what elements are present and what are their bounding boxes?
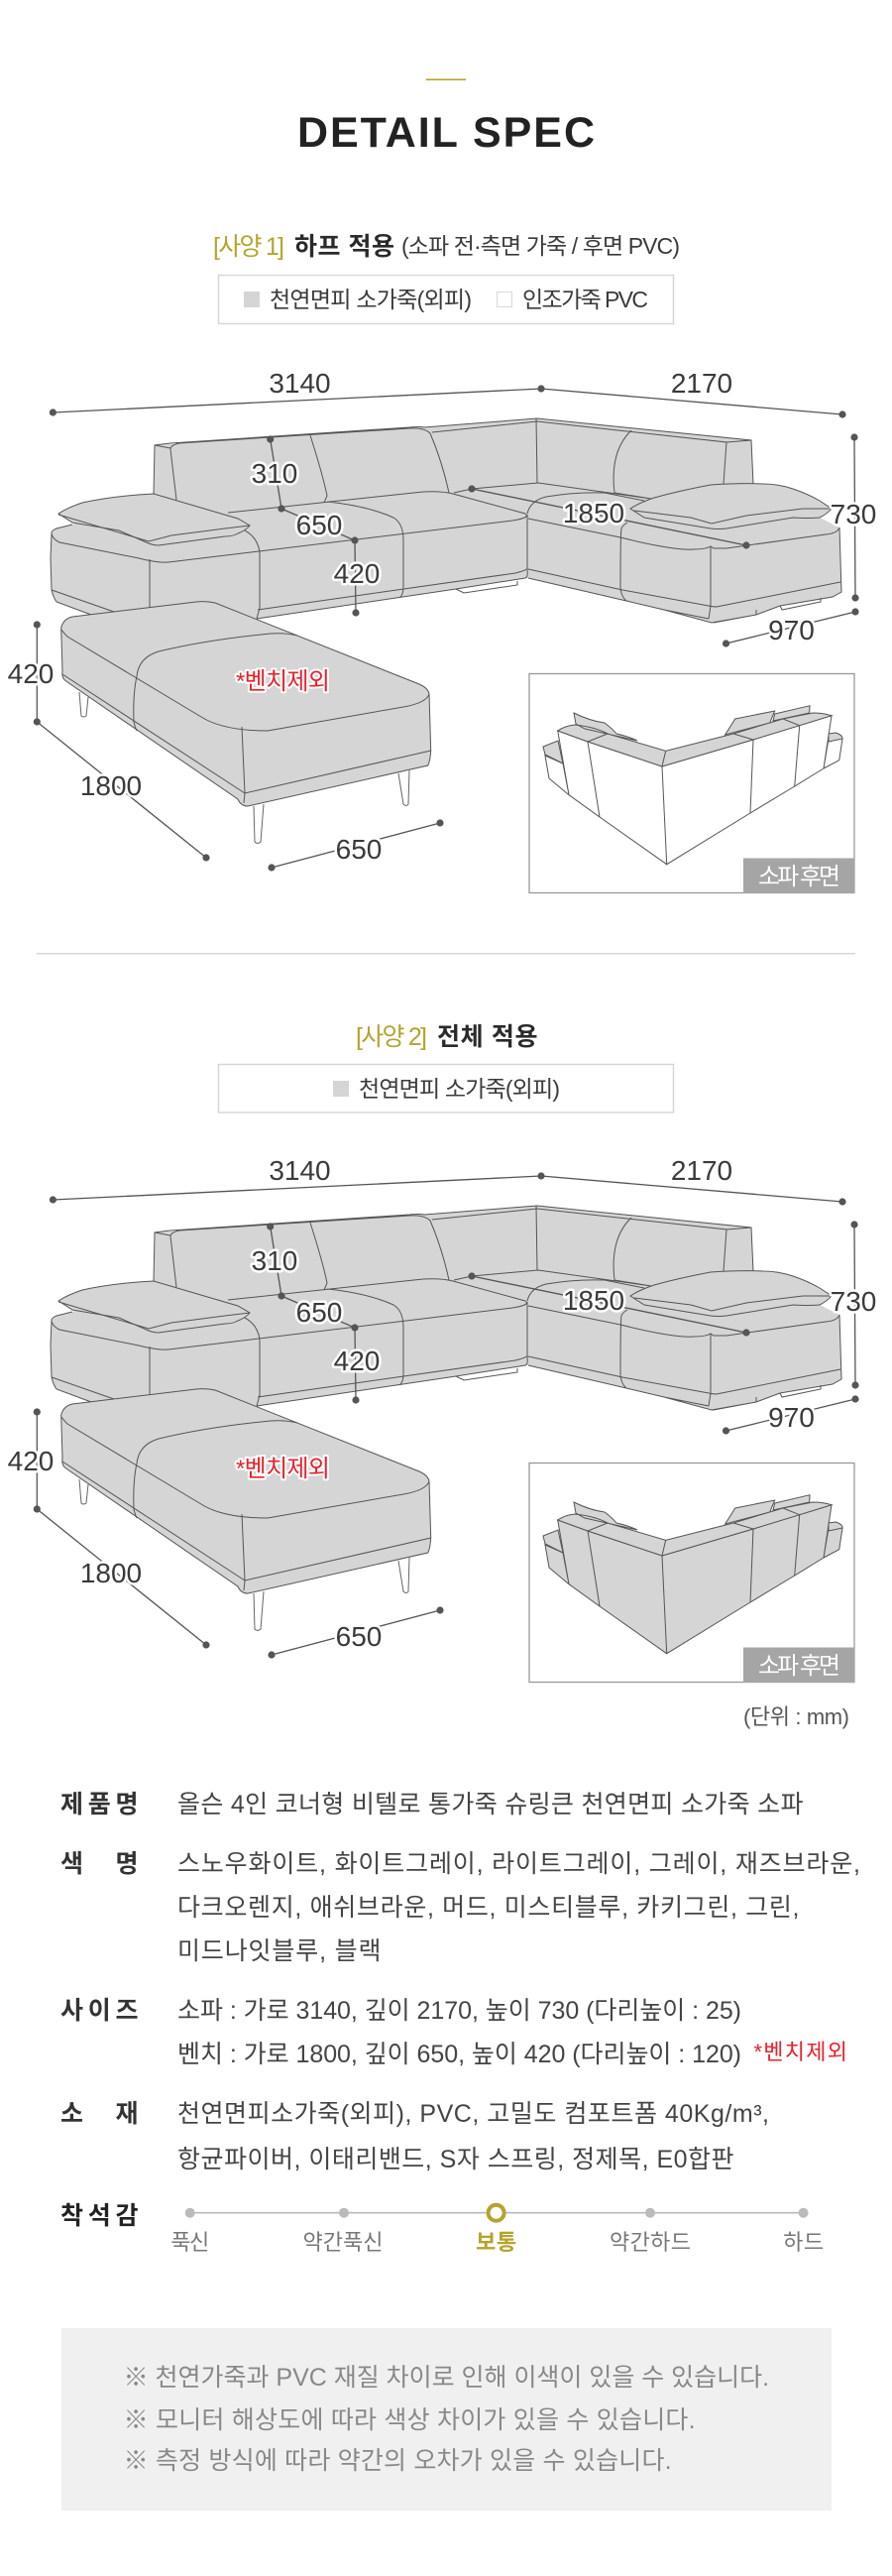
sofa diagram: spec 2 xyxy=(8,1155,876,1659)
rear view panel: spec 2 xyxy=(529,1464,854,1683)
dimension lines xyxy=(37,1176,855,1655)
sofa diagram: spec 1 xyxy=(8,368,876,872)
dimension labels: 650 xyxy=(336,834,382,865)
spec: material: 천연면피소가죽(외피), PVC, 고밀도 컴포트폼 40Kg/m³, xyxy=(177,2100,769,2128)
title accent line xyxy=(426,79,466,80)
legend box: spec 2 xyxy=(218,1065,674,1112)
spec: seating feel scale: 푹신 xyxy=(170,2230,209,2255)
dimension labels: 1800 xyxy=(80,1558,142,1588)
spec: material xyxy=(60,2100,769,2173)
legend box: spec 2: 천연면피 소가죽(외피) xyxy=(359,1076,560,1102)
legend box: spec 1: 천연면피 소가죽(외피) xyxy=(270,287,472,312)
spec: size: *벤치제외 xyxy=(753,2040,847,2064)
title: DETAIL SPEC xyxy=(297,109,595,157)
dimension labels: 2170 xyxy=(671,368,732,399)
dimension labels: 650 xyxy=(296,1297,342,1328)
notice box xyxy=(61,2328,832,2511)
spec: colors: 다크오렌지, 애쉬브라운, 머드, 미스티블루, 카키그린, 그린, xyxy=(177,1894,799,1922)
dimension labels: 650 xyxy=(336,1621,382,1652)
spec: colors: 스노우화이트, 화이트그레이, 라이트그레이, 그레이, 재즈브라운, xyxy=(177,1850,860,1878)
spec: seating feel scale: 보통 xyxy=(476,2230,516,2255)
bench excluded note: *벤치제외 xyxy=(236,668,330,695)
heading: spec 1: (소파 전·측면 가죽 / 후면 PVC) xyxy=(401,233,680,259)
spec: size: 벤치 : 가로 1800, 깊이 650, 높이 420 (다리높이 : 120) xyxy=(177,2041,741,2068)
spec: product name: 제품명 xyxy=(60,1791,139,1818)
dimension labels: 420 xyxy=(8,1446,54,1476)
dimension labels: 2170 xyxy=(671,1155,732,1186)
dimension labels: 420 xyxy=(334,558,380,589)
notice box: ※ 측정 방식에 따라 약간의 오차가 있을 수 있습니다. xyxy=(124,2447,672,2475)
unit note: (단위 : mm) xyxy=(743,1704,849,1729)
rear view panel: spec 2: 소파 후면 xyxy=(758,1653,840,1680)
dimension labels: 3140 xyxy=(269,1155,331,1186)
dimension labels: 730 xyxy=(831,1286,876,1317)
dimension labels: 650 xyxy=(296,510,342,540)
dimension labels: 1850 xyxy=(563,498,624,528)
dimension labels: 970 xyxy=(768,1402,815,1433)
spec: product name: 올슨 4인 코너형 비텔로 통가죽 슈링큰 천연면피 소가죽 소파 xyxy=(177,1791,803,1818)
rear view panel: spec 1 xyxy=(529,674,854,893)
dimension lines xyxy=(37,389,855,868)
spec: seating feel scale xyxy=(60,2202,824,2255)
heading: spec 2: 전체 적용 xyxy=(437,1023,537,1051)
spec: seating feel scale: 약간푹신 xyxy=(303,2230,383,2255)
spec: size: 소파 : 가로 3140, 깊이 2170, 높이 730 (다리높이 : 25) xyxy=(177,1997,741,2025)
notice box: ※ 모니터 해상도에 따라 색상 차이가 있을 수 있습니다. xyxy=(124,2406,696,2434)
notice box: ※ 천연가죽과 PVC 재질 차이로 인해 이색이 있을 수 있습니다. xyxy=(124,2364,769,2392)
spec: colors xyxy=(60,1850,860,1965)
spec: seating feel scale: 약간하드 xyxy=(610,2230,691,2255)
dimension labels xyxy=(8,1155,876,1652)
heading: spec 1: [사양 1] xyxy=(213,233,284,261)
dimension labels: 730 xyxy=(831,499,876,529)
rear view panel: spec 1: 소파 후면 xyxy=(758,864,840,890)
spec: seating feel scale: 하드 xyxy=(783,2230,824,2255)
dimension labels: 310 xyxy=(252,1245,297,1276)
legend box: spec 1: 인조가죽 PVC xyxy=(522,287,648,312)
dimension labels: 3140 xyxy=(269,368,331,399)
dimension labels: 970 xyxy=(768,615,815,645)
spec: size xyxy=(60,1997,847,2068)
spec: size: 사이즈 xyxy=(60,1997,139,2025)
dimension labels xyxy=(8,368,876,865)
spec: seating feel scale: 착석감 xyxy=(60,2202,139,2230)
dimension labels: 310 xyxy=(252,458,297,489)
heading: spec 1 xyxy=(213,233,680,261)
spec: material: 소 재 xyxy=(60,2100,139,2128)
dimension labels: 1800 xyxy=(80,770,142,801)
bench excluded note: *벤치제외 xyxy=(236,1456,330,1482)
dimension labels: 420 xyxy=(334,1346,380,1376)
legend box: spec 1 xyxy=(218,276,674,323)
heading: spec 1: 하프 적용 xyxy=(294,233,394,261)
dimension labels: 420 xyxy=(8,658,54,689)
dimension labels: 1850 xyxy=(563,1285,624,1316)
spec: colors: 미드나잇블루, 블랙 xyxy=(177,1937,381,1965)
spec: material: 항균파이버, 이태리밴드, S자 스프링, 정제목, E0합판 xyxy=(177,2146,733,2173)
heading: spec 2 xyxy=(356,1023,537,1051)
spec: colors: 색 명 xyxy=(60,1850,139,1878)
heading: spec 2: [사양 2] xyxy=(356,1023,427,1051)
